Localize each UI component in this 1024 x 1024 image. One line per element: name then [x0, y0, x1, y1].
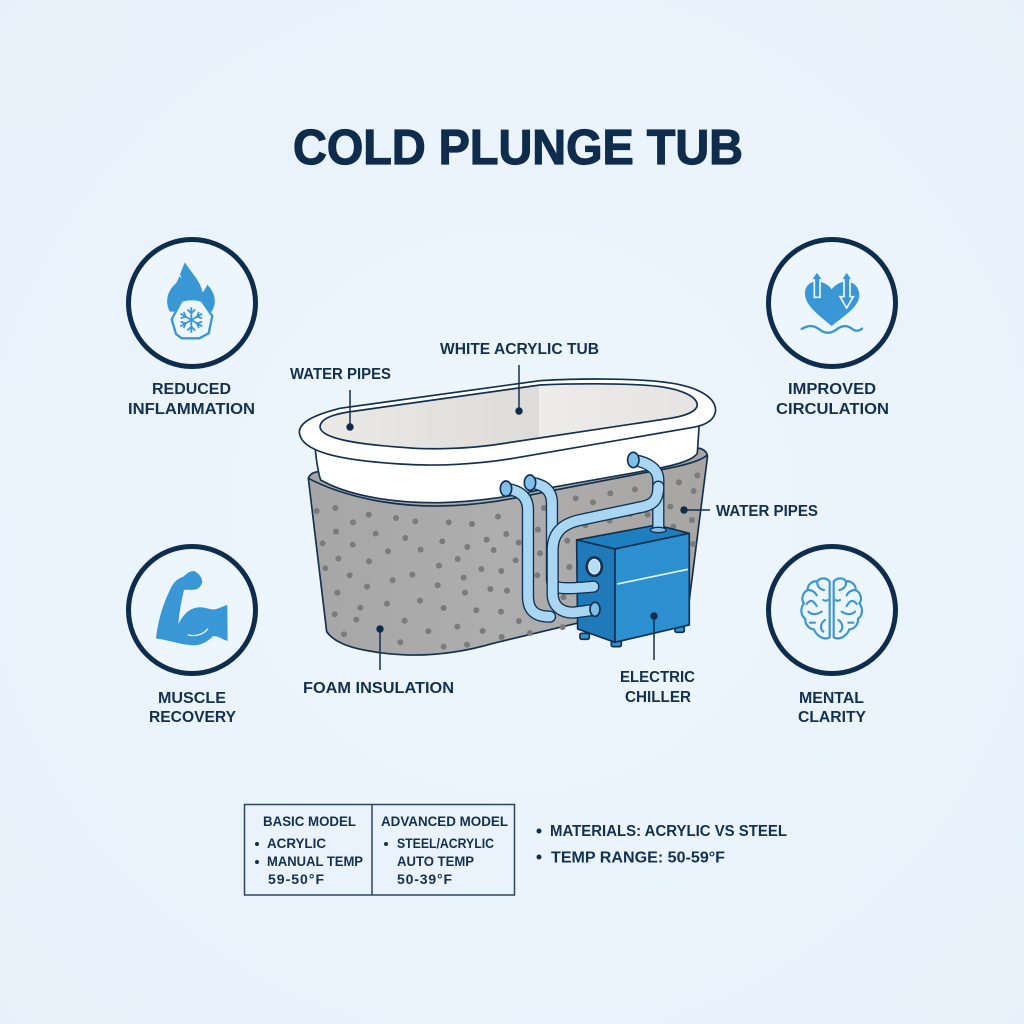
specification bullets: TEMP RANGE: 50-59°F [551, 850, 725, 866]
column: advanced model: 50-39°F [397, 871, 452, 887]
foam insulation shell [308, 448, 707, 655]
tub diagram [299, 379, 716, 655]
callout: foam insulation: FOAM INSULATION [303, 680, 454, 697]
column: advanced model: AUTO TEMP [397, 854, 474, 869]
electric chiller [577, 525, 689, 647]
label: mental clarity: CLARITY [798, 709, 866, 726]
icon: flame and snowflake [128, 240, 256, 366]
label: reduced inflammation [128, 381, 255, 418]
label: reduced inflammation: REDUCED [152, 381, 231, 398]
callout: water pipes left [290, 366, 391, 431]
callout: water pipes right: WATER PIPES [716, 503, 818, 520]
specification bullets: MATERIALS: ACRYLIC VS STEEL [550, 823, 787, 840]
callout: electric chiller: CHILLER [625, 689, 691, 706]
column: advanced model: ADVANCED MODEL [381, 814, 508, 829]
benefit: reduced inflammation [128, 240, 256, 418]
callout: electric chiller: ELECTRIC [620, 669, 695, 686]
callout: white acrylic tub: WHITE ACRYLIC TUB [440, 341, 599, 358]
column: basic model [255, 814, 363, 887]
label: mental clarity: MENTAL [799, 690, 864, 707]
callout: foam insulation [303, 625, 454, 697]
label: mental clarity [798, 690, 866, 726]
benefit: improved circulation [768, 240, 896, 418]
callout: water pipes left: WATER PIPES [290, 366, 391, 383]
specification bullets [536, 823, 787, 866]
column: basic model: BASIC MODEL [263, 814, 356, 829]
column: basic model: 59-50°F [268, 871, 324, 887]
column: advanced model: STEEL/ACRYLIC [397, 836, 494, 851]
tub interior [320, 384, 697, 449]
comparison table [244, 804, 514, 895]
label: muscle recovery: MUSCLE [158, 690, 226, 707]
icon: flexed arm [128, 546, 256, 674]
water pipes [500, 452, 666, 617]
benefit: mental clarity [768, 546, 896, 726]
column: advanced model [381, 814, 508, 887]
icon: heart with arrows and wave [768, 240, 896, 366]
column: basic model: MANUAL TEMP [267, 854, 363, 869]
label: improved circulation [776, 381, 889, 418]
label: muscle recovery [149, 690, 236, 726]
label: muscle recovery: RECOVERY [149, 709, 236, 726]
benefit: muscle recovery [128, 546, 256, 726]
icon: brain [768, 546, 896, 674]
column: basic model: ACRYLIC [267, 836, 326, 851]
label: reduced inflammation: INFLAMMATION [128, 401, 255, 418]
callout: white acrylic tub [440, 341, 599, 415]
label: improved circulation: IMPROVED [788, 381, 876, 398]
tub rim [299, 379, 716, 465]
white acrylic tub body [315, 423, 699, 503]
callout: electric chiller [620, 612, 695, 706]
title: COLD PLUNGE TUB [293, 121, 743, 175]
label: improved circulation: CIRCULATION [776, 401, 889, 418]
